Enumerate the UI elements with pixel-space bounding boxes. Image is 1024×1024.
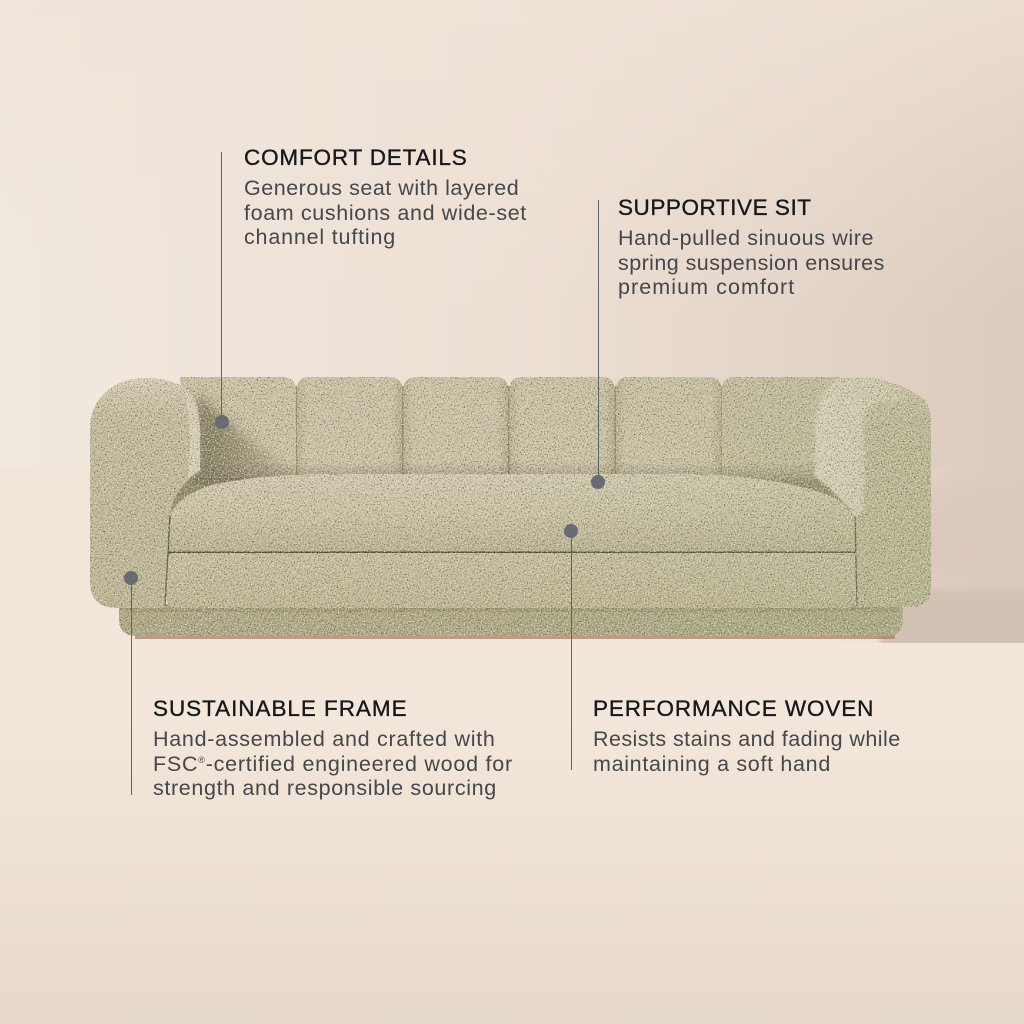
description: [593, 727, 901, 776]
floor shadow: [135, 591, 1024, 643]
description: Resists stains and fading while: [593, 727, 901, 751]
description: Hand-pulled sinuous wire: [618, 226, 874, 250]
back gap shadow: [165, 386, 860, 560]
cushion base shade: [190, 462, 820, 480]
description: Generous seat with layered: [244, 176, 519, 200]
description: [244, 176, 527, 249]
description: strength and responsible sourcing: [153, 776, 497, 800]
description: foam cushions and wide-set: [244, 201, 527, 225]
callout: sustainable frame: [124, 571, 513, 800]
wall: [0, 0, 1024, 475]
shadow under platform: [125, 607, 900, 612]
sofa base: [119, 604, 903, 636]
leader line: [221, 152, 222, 420]
description: Hand-assembled and crafted with: [153, 727, 496, 751]
heading: PERFORMANCE WOVEN: [593, 696, 874, 721]
callout: performance woven: [564, 524, 901, 776]
right arm: [815, 378, 931, 607]
seam between seat and platform: [167, 552, 856, 553]
marker dot: [591, 475, 605, 489]
callout: comfort details: [215, 145, 527, 429]
marker dot: [215, 415, 229, 429]
leader line: [598, 200, 599, 480]
heading: SUSTAINABLE FRAME: [153, 696, 408, 721]
back cushions: [180, 377, 840, 482]
sofa: [90, 377, 931, 636]
description: premium comfort: [618, 275, 795, 299]
right arm inner face: [815, 378, 925, 517]
lower seat platform: [166, 552, 857, 608]
marker dot: [564, 524, 578, 538]
floor: [0, 420, 1024, 1024]
seat cushion: [169, 474, 855, 552]
marker dot: [124, 571, 138, 585]
description: [153, 727, 513, 800]
shaded left inner corner: [196, 392, 304, 486]
green colour cast on right: [500, 377, 931, 636]
description: maintaining a soft hand: [593, 752, 831, 776]
leader line: [131, 578, 132, 795]
leader line: [571, 532, 572, 770]
left arm inner highlight: [185, 390, 200, 478]
left arm: [90, 378, 200, 608]
description: channel tufting: [244, 225, 396, 249]
description: [618, 226, 885, 299]
right seam: [855, 517, 857, 606]
heading: SUPPORTIVE SIT: [618, 195, 812, 220]
description: spring suspension ensures: [618, 251, 885, 275]
heading: COMFORT DETAILS: [244, 145, 468, 170]
left seam: [165, 515, 170, 606]
description: FSC®-certified engineered wood for: [153, 752, 513, 776]
callout: supportive sit: [591, 195, 885, 489]
